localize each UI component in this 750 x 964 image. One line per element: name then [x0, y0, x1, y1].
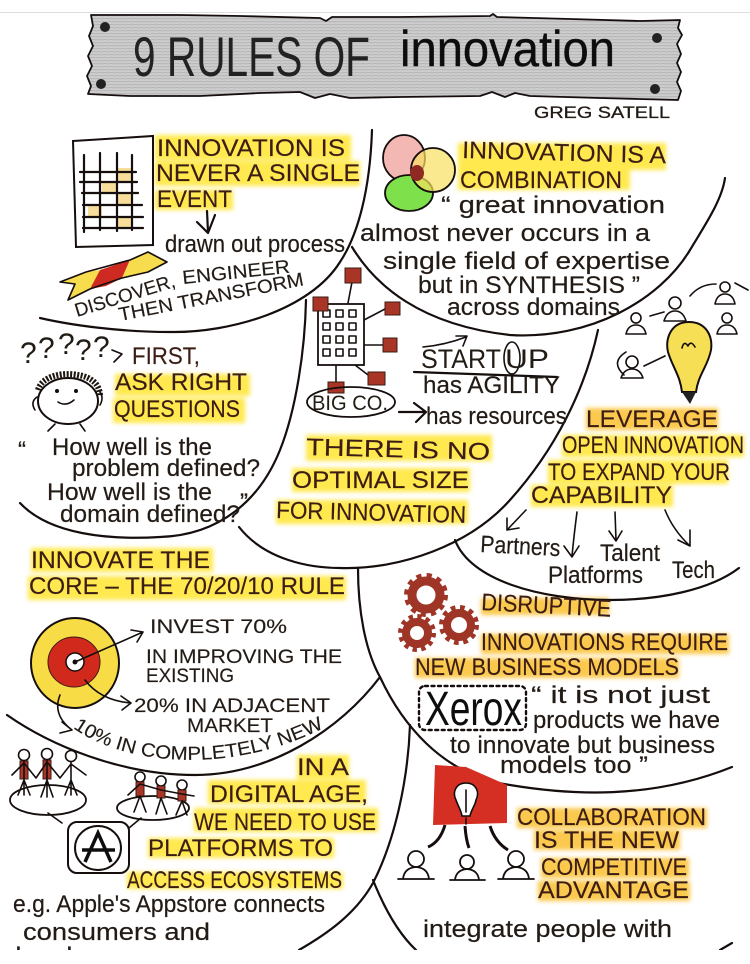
quote: great innovation [360, 192, 670, 321]
text: discover engineer then transform: ENGINEER [181, 257, 291, 289]
heading: first ask right questions: ASK RIGHT [115, 369, 247, 396]
heading: digital age platforms [127, 754, 376, 894]
heading: digital age platforms: IN A [297, 754, 349, 781]
arrow: big co to resources [399, 403, 426, 422]
text: invest 70 percent: EXISTING [146, 666, 234, 687]
heading: first ask right questions: QUESTIONS [114, 396, 240, 423]
panel: digital age platforms [6, 748, 376, 964]
panel: open innovation [480, 282, 748, 589]
icon: innovation grid [73, 136, 153, 247]
heading: there is no optimal size: OPTIMAL SIZE [292, 467, 469, 494]
icon: building network [313, 268, 400, 393]
text: appstore example: consumers and [23, 919, 210, 946]
arrows: four capability branches [507, 510, 690, 557]
heading: collaboration is the new competitive advantage: IS THE NEW [534, 827, 679, 854]
text: 20 percent adjacent market: MARKET [187, 716, 273, 737]
panel: first ask right questions [18, 328, 260, 528]
heading: there is no optimal size [276, 434, 490, 529]
heading: leverage open innovation [531, 406, 744, 509]
labels: partners talent platforms tech: Partners [480, 531, 561, 562]
text: appstore example [6, 891, 325, 964]
text: 20 percent adjacent market [134, 696, 330, 737]
heading: disruptive innovations [415, 589, 728, 681]
icon: gears [401, 576, 476, 649]
orange highlighter marks [415, 408, 729, 901]
quote: not just products: products we have [533, 707, 720, 734]
text: drawn out process: drawn out process [165, 231, 345, 258]
icon: question marks: ? [20, 337, 37, 370]
heading: innovation is never a single event [156, 135, 360, 213]
icon: people group left [10, 748, 86, 815]
text: has resources: has resources [426, 403, 567, 430]
heading: innovation is never a single event: EVENT [157, 186, 232, 213]
heading: innovation is a combination: INNOVATION IS A [462, 137, 666, 169]
text: appstore example: e.g. Apple's Appstore connects [13, 891, 325, 918]
panel: disruptive innovations [401, 576, 728, 779]
title banner [87, 14, 682, 100]
icon: venn diagram [383, 135, 455, 211]
icon: light bulb [667, 322, 711, 404]
quote: how well is the problem defined [18, 434, 260, 528]
labels: partners talent platforms tech [480, 531, 715, 589]
heading: collaboration is the new competitive advantage: COLLABORATION [517, 804, 706, 831]
heading: 70/20/10 rule: INNOVATE THE [31, 547, 210, 574]
quote: not just products [450, 682, 720, 779]
quote: not just products: models too ” [500, 752, 648, 779]
text: discover engineer then transform: DISCOVER, [72, 271, 178, 322]
bottom white margin [0, 950, 750, 964]
heading: disruptive innovations: NEW BUSINESS MODELS [415, 654, 679, 681]
heading: innovation is never a single event: NEVER A SINGLE [156, 160, 360, 187]
icon: question marks: ? [58, 328, 75, 361]
panel: innovation is a combination [360, 135, 670, 321]
text: invest 70 percent: IN IMPROVING THE [146, 647, 342, 668]
text: invest 70 percent [146, 617, 342, 687]
heading: 70/20/10 rule [29, 547, 345, 600]
panel: collaboration [398, 765, 706, 943]
text: invest 70 percent: INVEST 70% [150, 617, 287, 638]
quote: how well is the problem defined: How well is the [47, 479, 212, 506]
arrows: target to percentages [58, 630, 143, 733]
startup with agility: START [421, 344, 501, 374]
icon: question marks: ? [93, 331, 110, 364]
icon: target [31, 618, 119, 708]
icon: thinking character [33, 374, 102, 431]
quote: great innovation: almost never occurs in a [360, 220, 651, 247]
icon: question marks [20, 328, 122, 370]
quote: not just products: “ it is not just [531, 682, 710, 709]
label: big co [307, 387, 395, 417]
startup with agility: UP [505, 344, 549, 374]
title text: innovation: innovation [400, 21, 615, 77]
heading: there is no optimal size: FOR INNOVATION [276, 497, 466, 529]
label: big co: BIG CO. [312, 392, 388, 415]
quote: how well is the problem defined: domain defined? [60, 501, 240, 528]
text: discover engineer then transform [72, 257, 305, 326]
panel: no optimal size [276, 268, 567, 529]
text: 20 percent adjacent market: 20% IN ADJACENT [134, 696, 330, 717]
labels: partners talent platforms tech: Tech [672, 557, 715, 584]
heading: digital age platforms: ACCESS ECOSYSTEMS [127, 867, 342, 894]
heading: 70/20/10 rule: CORE – THE 70/20/10 RULE [29, 573, 345, 600]
icon: red idea board [428, 765, 508, 850]
heading: disruptive innovations: DISRUPTIVE [481, 589, 612, 623]
author credit: GREG SATELL [534, 103, 670, 122]
text: discover engineer then transform: THEN TRANSFORM [117, 269, 305, 326]
heading: first ask right questions: FIRST, [132, 343, 200, 370]
heading: digital age platforms: PLATFORMS TO [148, 835, 333, 862]
quote: great innovation: single field of expertise [383, 248, 670, 275]
heading: innovation is a combination [460, 137, 666, 194]
heading: collaboration is the new competitive advantage [517, 804, 706, 904]
heading: leverage open innovation: CAPABILITY [531, 482, 672, 509]
panel: never a single event [60, 135, 360, 326]
quote: great innovation: “ great innovation [441, 192, 665, 219]
icon: question marks: ? [75, 334, 92, 367]
quote: how well is the problem defined: problem defined? [72, 455, 260, 482]
icon: question marks: ? [38, 332, 55, 365]
heading: innovation is never a single event: INNOVATION IS [157, 135, 345, 162]
heading: there is no optimal size: THERE IS NO [306, 434, 490, 466]
icon: people network [617, 282, 748, 378]
quote: great innovation: across domains [447, 294, 620, 321]
heading: digital age platforms: WE NEED TO USE [194, 809, 376, 836]
heading: collaboration is the new competitive advantage: ADVANTAGE [538, 877, 689, 904]
heading: first ask right questions [114, 343, 247, 423]
quote: great innovation: but in SYNTHESIS ” [418, 272, 640, 299]
quote: not just products: to innovate but business [450, 732, 715, 759]
heading: innovation is a combination: COMBINATION [460, 167, 622, 194]
title text: 9 RULES OF [133, 25, 370, 88]
startup with agility [414, 336, 560, 399]
text: 10 percent in completely new: 10% IN COMPLETELY NEW [74, 716, 320, 760]
icon: people group right [117, 772, 194, 820]
labels: partners talent platforms tech: Talent [600, 540, 660, 567]
startup with agility: has AGILITY [423, 372, 560, 399]
icon: app store [48, 813, 141, 873]
quote: how well is the problem defined: How well is the [52, 434, 212, 461]
heading: leverage open innovation: LEVERAGE [586, 406, 718, 433]
highlighter marks [28, 135, 744, 889]
icon: ribbon arrow [60, 252, 167, 300]
labels: partners talent platforms tech: Platforms [548, 562, 643, 589]
icon: three people [398, 851, 534, 880]
quote: how well is the problem defined: ” [240, 489, 248, 516]
text: integrate people with: integrate people with [423, 916, 672, 943]
heading: digital age platforms: DIGITAL AGE, [210, 781, 368, 808]
panel: innovate the core [29, 547, 345, 760]
arrow: event to process [197, 211, 215, 233]
icon: xerox logo: Xerox [425, 683, 522, 736]
heading: collaboration is the new competitive advantage: COMPETITIVE [541, 854, 687, 881]
quote: how well is the problem defined: “ [18, 437, 26, 464]
